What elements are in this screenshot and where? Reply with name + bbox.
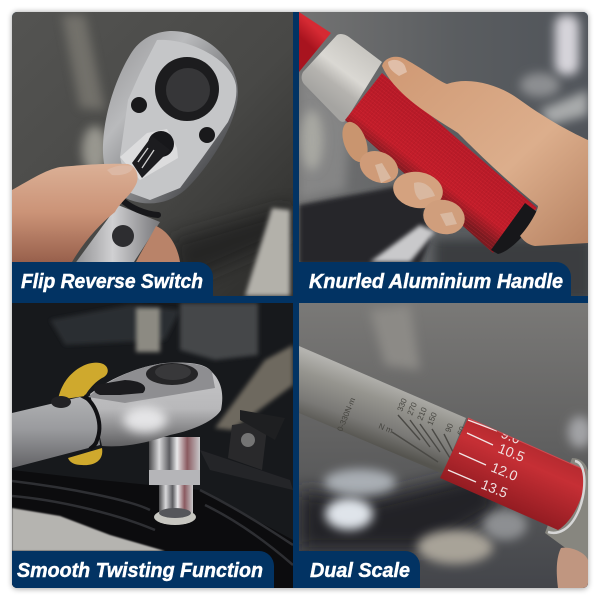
drive button (146, 363, 198, 385)
silver wrench tube (299, 346, 467, 474)
wrench shaft (74, 205, 160, 265)
scale ticks and numbers: 10.5 (496, 440, 527, 465)
label: flip reverse switch: Flip Reverse Switch (21, 271, 203, 293)
thumb and hand (12, 164, 138, 262)
ratchet drive socket (155, 57, 219, 121)
hand lower finger (136, 226, 180, 262)
tube engraving: 90 (444, 422, 455, 434)
panel background (12, 12, 293, 296)
black plastic ribs (12, 481, 293, 565)
silver end collar (545, 458, 588, 560)
label: smooth twisting function (12, 551, 274, 588)
panel: flip reverse switch (12, 12, 293, 296)
drive button (166, 68, 210, 112)
tube engraving: 270 (406, 400, 419, 417)
scale ticks and numbers (448, 420, 527, 501)
yellow ring (58, 363, 108, 465)
panel: knurled aluminium handle (299, 12, 590, 300)
finger nails (375, 163, 457, 226)
label: knurled aluminium handle (299, 262, 571, 296)
scale ticks and numbers: 13.5 (479, 476, 510, 501)
silver collar (302, 34, 382, 122)
tube engraving: 150 (426, 410, 439, 427)
panel: dual scale (299, 303, 592, 588)
engine bay background (12, 303, 293, 590)
thumbnail (388, 60, 407, 76)
shaft pin (51, 396, 71, 408)
top face (88, 363, 215, 403)
blurred background highlights (299, 15, 590, 300)
screw right (199, 127, 215, 143)
blurred background highlights (62, 15, 293, 296)
tube engraving: 210 (416, 405, 429, 422)
ratchet head (88, 363, 222, 446)
label: dual scale (299, 551, 420, 588)
knurled red handle (345, 73, 537, 254)
sleeve end ring (548, 461, 584, 533)
panel: smooth twisting function (12, 303, 293, 590)
tube engraving: 330 (396, 396, 409, 413)
tube engraving: 0-330N·m (336, 396, 357, 433)
fingers (342, 122, 368, 162)
bracket (228, 424, 266, 470)
red wrench shaft (299, 12, 331, 72)
label: smooth twisting function: Smooth Twisting Function (17, 560, 263, 582)
handle end cap (491, 203, 537, 254)
red scale sleeve (440, 418, 585, 533)
reverse lever (94, 380, 145, 395)
label: dual scale: Dual Scale (310, 560, 410, 582)
scale ticks and numbers: 9.0 (499, 425, 523, 447)
blurred background highlights (299, 305, 592, 564)
hand (337, 57, 588, 246)
ratchet highlight (123, 407, 167, 433)
tube engraving: 60 (456, 425, 467, 437)
knurled band (149, 470, 200, 485)
wrench shaft (12, 396, 100, 468)
socket (149, 437, 200, 525)
scale ticks and numbers: 12.0 (489, 459, 520, 484)
ratchet head (103, 31, 238, 203)
tube engraving (336, 396, 467, 462)
o-ring (120, 198, 158, 215)
hand fragment (557, 548, 588, 588)
panel background (299, 303, 588, 588)
ratchet face plate (120, 40, 236, 200)
shaft button (112, 225, 134, 247)
panel background (299, 12, 588, 296)
thumbnail (107, 165, 133, 175)
pale engine block (12, 508, 165, 551)
label: flip reverse switch (12, 262, 213, 296)
bolt base (154, 512, 196, 525)
label: knurled aluminium handle: Knurled Aluminium Handle (309, 271, 563, 293)
o-ring (84, 396, 99, 449)
panel background (12, 303, 293, 588)
screw left (131, 97, 147, 113)
palm and thumb (382, 57, 588, 246)
switch lever (120, 129, 178, 180)
tube engraving: N m (377, 422, 395, 435)
